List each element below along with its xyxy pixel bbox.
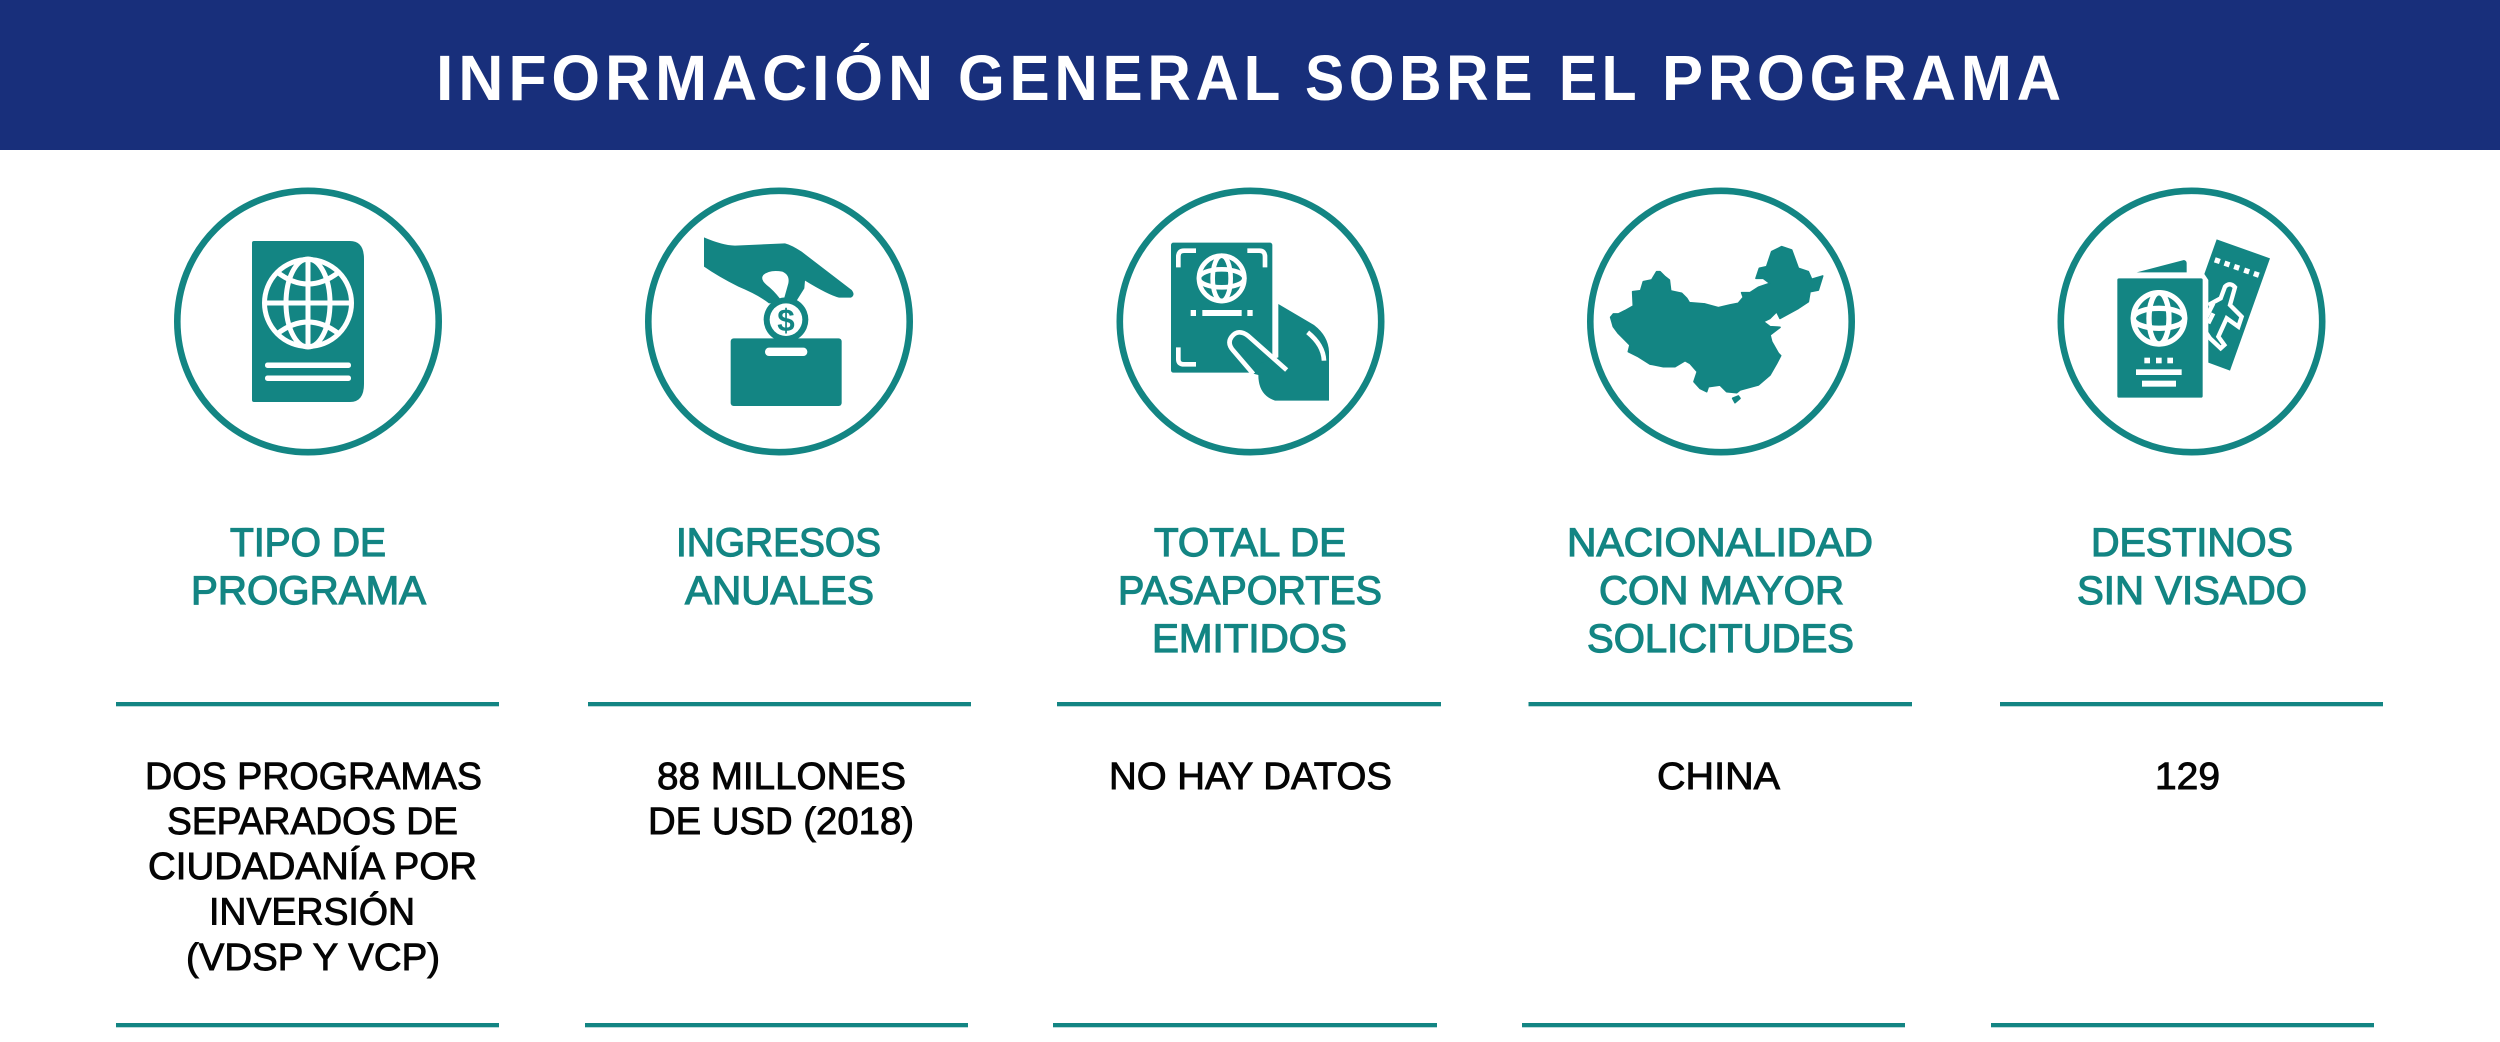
panel: tipo de programa xyxy=(116,191,499,1027)
panel: nacionalidad con mayor solicitudes xyxy=(1522,191,1912,1027)
panel: total de pasaportes emitidos xyxy=(1053,191,1441,1027)
header band with title xyxy=(0,0,2500,150)
heading: total de pasaportes emitidos: EMITIDOS xyxy=(1152,617,1347,661)
heading: ingresos anuales xyxy=(676,521,881,613)
icon: passport with globe xyxy=(177,191,439,452)
title: GENERAL xyxy=(958,42,1284,114)
value: tipo de programa: (VDSP Y VCP) xyxy=(186,937,440,979)
heading: nacionalidad con mayor solicitudes: NACIONALIDAD xyxy=(1567,521,1873,565)
heading: nacionalidad con mayor solicitudes: SOLICITUDES xyxy=(1587,617,1854,661)
heading: ingresos anuales: INGRESOS xyxy=(676,521,881,565)
value: tipo de programa: DOS PROGRAMAS xyxy=(145,756,482,798)
value: ingresos anuales: DE USD (2018) xyxy=(648,801,914,843)
panel: ingresos anuales xyxy=(585,191,971,1027)
value: total de pasaportes emitidos: NO HAY DATOS xyxy=(1109,756,1392,798)
heading: destinos sin visado: SIN VISADO xyxy=(2077,569,2307,613)
heading: total de pasaportes emitidos: PASAPORTES xyxy=(1118,569,1382,613)
heading: tipo de programa: PROGRAMA xyxy=(191,569,426,613)
heading: ingresos anuales: ANUALES xyxy=(685,569,874,613)
heading: total de pasaportes emitidos xyxy=(1118,521,1382,661)
value: tipo de programa: CIUDADANÍA POR xyxy=(148,845,477,888)
heading: nacionalidad con mayor solicitudes xyxy=(1567,521,1873,661)
heading: tipo de programa: TIPO DE xyxy=(230,521,386,565)
icon: passport and plane ticket xyxy=(2061,191,2322,452)
value: ingresos anuales: 88 MILLONES xyxy=(657,756,906,798)
heading: nacionalidad con mayor solicitudes: CON MAYOR xyxy=(1599,569,1844,613)
value: tipo de programa: SEPARADOS DE xyxy=(167,801,458,843)
value: nacionalidad con mayor solicitudes: CHINA xyxy=(1657,756,1781,798)
title: EL xyxy=(1559,42,1640,114)
value: ingresos anuales xyxy=(648,756,914,843)
icon: map of China xyxy=(1590,191,1852,452)
title: PROGRAMA xyxy=(1662,42,2066,114)
icon: hand dropping coin into box xyxy=(648,191,910,452)
value: tipo de programa: INVERSIÓN xyxy=(209,890,415,934)
panel: destinos sin visado xyxy=(1991,191,2383,1027)
heading: destinos sin visado xyxy=(2077,521,2307,613)
value: destinos sin visado: 129 xyxy=(2155,756,2220,798)
title: INFORMACIÓN xyxy=(436,42,938,114)
title: SOBRE xyxy=(1305,42,1537,114)
icon: hand dropping coin into box: $ xyxy=(777,303,795,338)
heading: tipo de programa xyxy=(191,521,426,613)
heading: total de pasaportes emitidos: TOTAL DE xyxy=(1154,521,1346,565)
value: tipo de programa xyxy=(145,756,482,979)
heading: destinos sin visado: DESTINOS xyxy=(2091,521,2293,565)
icon: hand pointing at passport xyxy=(1120,191,1381,452)
